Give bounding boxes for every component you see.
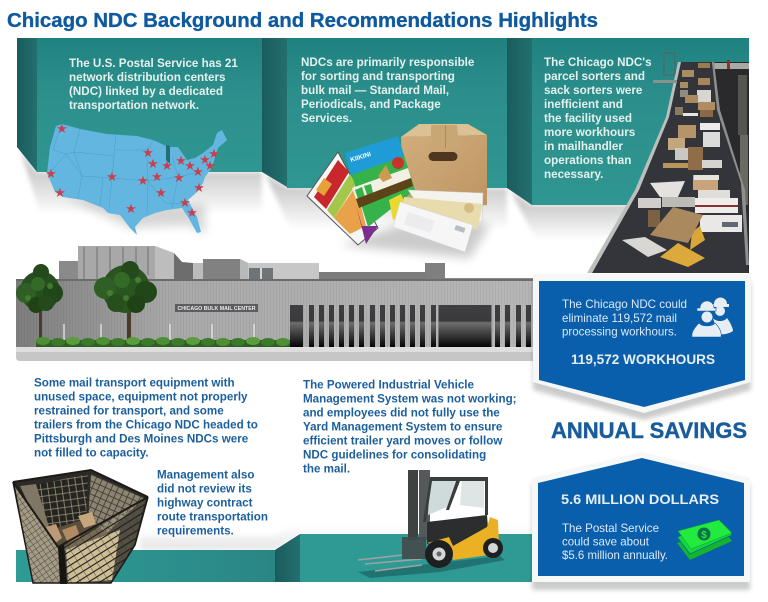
text: powered industrial vehicle: The Powered Industrial Vehicle (303, 378, 475, 392)
text: sorters: necessary. (544, 168, 603, 181)
text: sorters: more workhours (544, 126, 635, 139)
text: sorters: The Chicago NDC's (544, 56, 652, 69)
text: sorters: operations than (544, 154, 631, 167)
cab (428, 479, 456, 515)
NDC stars: ★ (199, 153, 211, 168)
forklift shadow (358, 556, 505, 578)
text: highway contract review: route transportation (157, 510, 268, 524)
text: sorters: inefficient and (544, 98, 623, 111)
text: mail transport equipment: unused space, equipment not properly (34, 390, 248, 404)
icon: magazine (345, 136, 415, 227)
NDC stars: ★ (56, 122, 68, 137)
text: highway contract review: highway contract (157, 496, 253, 510)
text: workhours description: eliminate 119,572 mail (562, 311, 677, 325)
building sign: CHICAGO BULK MAIL CENTER (178, 306, 256, 312)
front wheel (425, 540, 453, 568)
icon: magazine: KIIKINI (350, 151, 372, 164)
body (427, 517, 499, 560)
NDC stars: ★ (184, 159, 196, 174)
NDC stars (45, 122, 220, 221)
bottom teal band (16, 518, 533, 582)
forks (358, 555, 422, 571)
rear wheel (483, 538, 503, 558)
text: responsibilities: bulk mail — Standard Mail, (301, 84, 449, 97)
NDC stars: ★ (151, 170, 163, 185)
box: dollars (532, 452, 750, 590)
tree: left (16, 264, 63, 344)
box: workhours (533, 274, 751, 420)
text: savings description: could save about (562, 534, 650, 548)
text: highway contract review (157, 468, 268, 538)
text: savings description: $5.6 million annually. (562, 548, 668, 562)
NDC stars: ★ (179, 196, 191, 211)
text: network centers (69, 57, 238, 112)
text: workhours description (562, 297, 687, 338)
panel: network distribution centers (17, 38, 262, 212)
NDC stars: ★ (155, 186, 167, 201)
parcels (622, 63, 742, 267)
NDC stars: ★ (142, 146, 154, 161)
text: highway contract review: requirements. (157, 524, 234, 538)
NDC stars: ★ (106, 170, 118, 185)
text: powered industrial vehicle: efficient trailer yard moves or follow (303, 434, 503, 448)
text: savings description: The Postal Service (562, 521, 659, 535)
text: responsibilities: NDCs are primarily responsible (301, 56, 475, 69)
text: mail transport equipment: restrained for transport, and some (34, 404, 224, 418)
photo: conveyor with parcels (587, 53, 749, 273)
NDC stars: ★ (161, 159, 173, 174)
map of United States with NDC stars (45, 122, 227, 235)
windows (290, 305, 531, 347)
NDC stars: ★ (147, 157, 159, 172)
panel: sorters (507, 38, 749, 238)
text: 119,572 workhours: 119,572 WORKHOURS (571, 352, 715, 367)
text: sorters: parcel sorters and (544, 70, 645, 83)
text: powered industrial vehicle (303, 378, 517, 476)
text: sorters: in mailhandler (544, 140, 623, 153)
rooftop structures (59, 246, 535, 281)
hedge (36, 337, 290, 347)
text: responsibilities (301, 56, 475, 125)
text: sorters (544, 56, 652, 181)
text: network centers: (NDC) linked by a dedicated (69, 85, 223, 98)
text: network centers: network distribution centers (69, 71, 226, 84)
text: highway contract review: Management also (157, 468, 254, 482)
NDC stars: ★ (192, 165, 204, 180)
text: mail transport equipment: not filled to capacity. (34, 446, 149, 460)
NDC stars: ★ (208, 147, 220, 162)
text: powered industrial vehicle: Yard Management System to ensure (303, 420, 503, 434)
icon: workers with hard hats (692, 298, 733, 337)
text: workhours description: processing workhours. (562, 324, 677, 338)
text: highway contract review: did not review its (157, 482, 252, 496)
text: responsibilities: for sorting and transporting (301, 70, 455, 83)
NDC stars: ★ (54, 186, 66, 201)
icon: envelopes (393, 190, 483, 252)
NDC stars: ★ (193, 181, 205, 196)
wall (16, 280, 534, 347)
text: sorters: the facility used (544, 112, 632, 125)
NDC stars: ★ (186, 206, 198, 221)
mast (408, 470, 418, 540)
text: mail transport equipment: Pittsburgh and Des Moines NDCs were (34, 432, 249, 446)
text: powered industrial vehicle: the mail. (303, 462, 350, 476)
sidewalk (16, 347, 534, 361)
mail pieces: magazines, box, envelopes (307, 124, 490, 258)
forklift (358, 470, 505, 578)
text: savings description (562, 521, 668, 562)
text: responsibilities: Periodicals, and Package (301, 98, 441, 111)
text: mail transport equipment (34, 376, 258, 460)
icon: parcel box (401, 124, 487, 212)
NDC stars: ★ (45, 167, 57, 182)
text: sorters: sack sorters were (544, 84, 643, 97)
NDC stars: ★ (173, 171, 185, 186)
icon: stack of money: $ (701, 530, 707, 541)
icon: catalog cards (307, 152, 378, 245)
building: Chicago bulk mail center (16, 246, 535, 361)
tree: right (94, 261, 157, 345)
light poles (64, 324, 254, 345)
NDC stars: ★ (175, 154, 187, 169)
NDC stars: ★ (204, 159, 216, 174)
text: powered industrial vehicle: NDC guidelines for consolidating (303, 448, 486, 462)
text: network centers: The U.S. Postal Service has 21 (69, 57, 238, 70)
photo: mail transport cage (13, 470, 148, 584)
title: Chicago NDC Background and Recommendations Highlights (7, 9, 598, 32)
panel: NDC responsibilities (262, 38, 507, 228)
text: mail transport equipment: Some mail transport equipment with (34, 376, 235, 390)
text: workhours description: The Chicago NDC could (562, 297, 687, 311)
text: 5.6 million dollars: 5.6 MILLION DOLLARS (561, 491, 719, 507)
heading: annual savings: ANNUAL SAVINGS (551, 418, 747, 443)
text: mail transport equipment: trailers from the Chicago NDC headed to (34, 418, 258, 432)
text: responsibilities: Services. (301, 112, 352, 125)
text: powered industrial vehicle: Management System was not working; (303, 392, 517, 406)
icon: stack of money (677, 520, 732, 560)
NDC stars: ★ (125, 202, 137, 217)
text: powered industrial vehicle: and employees did not fully use the (303, 406, 500, 420)
text: network centers: transportation network. (69, 99, 199, 112)
NDC stars: ★ (137, 174, 149, 189)
